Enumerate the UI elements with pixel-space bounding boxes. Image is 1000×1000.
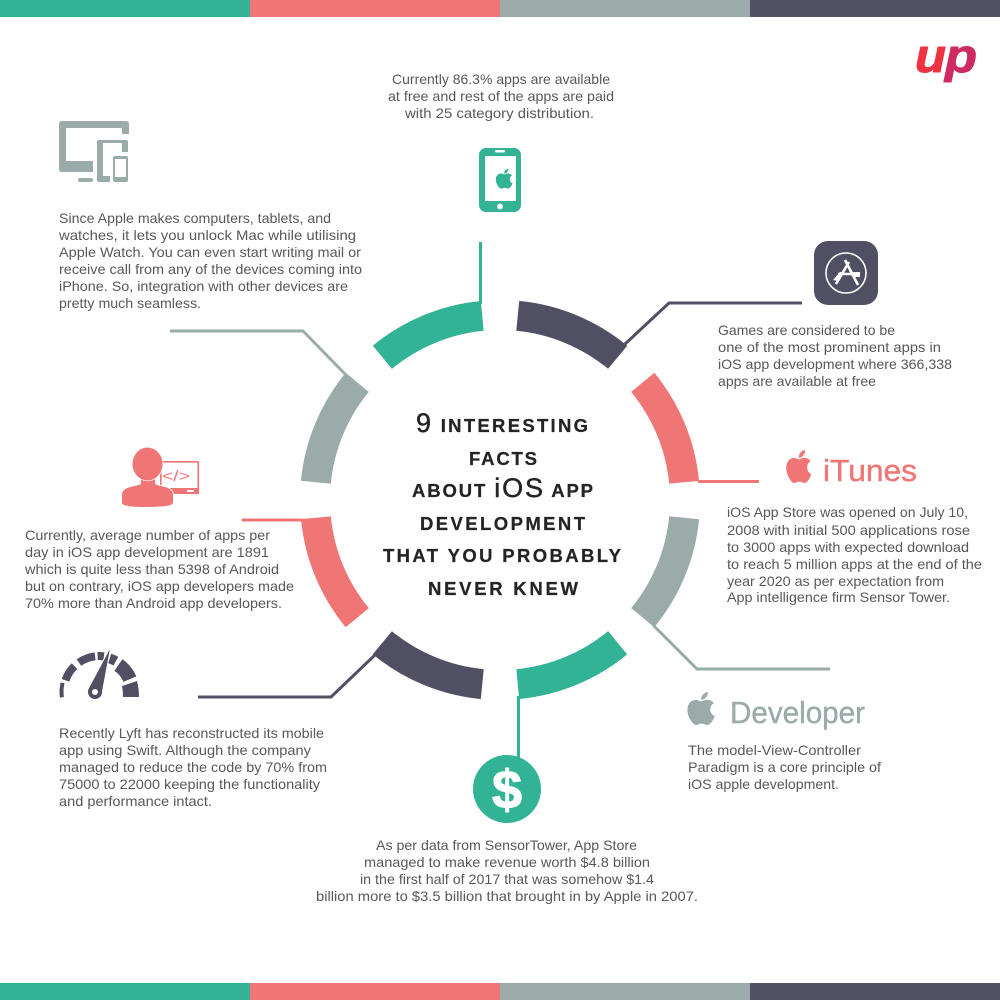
icon: Developer logo: Developer — [730, 695, 865, 730]
text: App Store history: 2008 with initial 500 applications rose — [727, 522, 970, 538]
text: device integration: Since Apple makes computers, tablets, and — [59, 210, 331, 226]
title — [383, 408, 622, 599]
icon: Developer logo — [687, 692, 865, 730]
text: device integration: iPhone. So, integration with other devices are — [59, 278, 348, 294]
connector: red left — [242, 518, 303, 522]
text: revenue: managed to make revenue worth $4.8 billion — [364, 854, 650, 870]
text: games: one of the most prominent apps in — [718, 339, 941, 355]
text: games: Games are considered to be — [718, 322, 895, 338]
text: MVC: Paradigm is a core principle of — [688, 759, 881, 775]
text: device integration: pretty much seamless. — [59, 295, 201, 311]
text: MVC — [688, 742, 881, 792]
text: revenue: in the first half of 2017 that was somehow $1.4 — [360, 871, 654, 887]
connector: dark bottom left — [198, 654, 376, 697]
text: App Store history: iOS App Store was opened on July 10, — [727, 504, 968, 520]
top colour band — [0, 0, 1000, 17]
ring segment: dark bottom left — [373, 631, 484, 699]
title: DEVELOPMENT — [420, 513, 586, 534]
icon: phone — [479, 148, 521, 212]
connector: teal top — [479, 242, 482, 304]
icon: dollar coin — [473, 755, 541, 823]
text: Lyft: and performance intact. — [59, 793, 212, 809]
title: NEVER KNEW — [428, 578, 579, 599]
icon: iTunes logo: iTunes — [823, 453, 917, 488]
panel: device integration fact — [58, 121, 369, 484]
icon: developer with code screen: </> — [162, 468, 190, 485]
text: revenue — [316, 837, 698, 904]
text: App Store history: to 3000 apps with expected download — [727, 539, 969, 555]
text: device integration: receive call from any of the devices coming into — [59, 261, 362, 277]
icon: app store — [814, 241, 878, 305]
connector: grey left — [170, 331, 347, 376]
text: apps per day: Currently, average number of apps per — [25, 527, 270, 543]
text: free apps: with 25 category distribution. — [404, 105, 594, 121]
text: apps per day: which is quite less than 5398 of Android — [24, 561, 279, 577]
text: Lyft: Recently Lyft has reconstructed its mobile — [59, 725, 324, 741]
text: free apps: Currently 86.3% apps are available — [392, 71, 610, 87]
ring segment: red left — [269, 503, 396, 629]
text: free apps — [388, 71, 614, 121]
text: MVC: iOS apple development. — [688, 776, 839, 792]
icon: speedometer — [62, 646, 139, 697]
text: App Store history: App intelligence firm Sensor Tower. — [727, 589, 950, 605]
text: device integration: watches, it lets you unlock Mac while utilising — [58, 227, 356, 243]
text: Lyft: managed to reduce the code by 70% from — [59, 759, 327, 775]
ring segment: teal bottom — [503, 604, 629, 731]
panel: free apps fact — [371, 71, 614, 396]
ring segment: red right — [604, 371, 731, 497]
text: apps per day: 70% more than Android app developers. — [25, 595, 282, 611]
bottom colour band — [0, 983, 1000, 1000]
panel: revenue fact — [316, 604, 698, 904]
text: device integration: Apple Watch. You can even start writing mail or — [59, 244, 361, 260]
text: device integration — [58, 210, 362, 311]
ring segment: teal top — [371, 269, 497, 396]
panel: MVC developer fact — [631, 516, 881, 792]
text: games: apps are available at free — [718, 373, 876, 389]
text: games — [718, 322, 952, 389]
logo: up: u — [915, 29, 946, 82]
text: Lyft — [59, 725, 327, 809]
text: Lyft: app using Swift. Although the company — [59, 742, 311, 758]
text: apps per day — [24, 527, 294, 611]
icon: iTunes logo — [786, 450, 917, 488]
title: FACTS — [469, 448, 537, 469]
text: App Store history: year 2020 as per expectation from — [727, 573, 944, 589]
logo: up: p — [943, 29, 977, 82]
panel: App Store history fact — [604, 371, 982, 605]
icon: desktop tablet and phone — [59, 121, 129, 182]
title: ABOUT iOS APP — [412, 473, 593, 503]
connector: grey right — [653, 625, 830, 669]
panel: Lyft Swift fact — [59, 631, 484, 809]
ring segment: grey right — [631, 516, 699, 627]
panel: apps per day fact — [24, 448, 396, 629]
title: 9 INTERESTING — [416, 408, 588, 438]
title: THAT YOU PROBABLY — [383, 545, 622, 566]
ring segment: dark top right — [516, 301, 627, 369]
connector: dark top right — [624, 303, 802, 345]
text: apps per day: day in iOS app development are 1891 — [25, 544, 269, 560]
text: revenue: billion more to $3.5 billion that brought in by Apple in 2007. — [316, 888, 698, 904]
text: free apps: at free and rest of the apps are paid — [388, 88, 614, 104]
text: games: iOS app development where 366,338 — [718, 356, 952, 372]
text: revenue: As per data from SensorTower, App Store — [376, 837, 637, 853]
connector: teal bottom — [517, 696, 520, 758]
panel: games fact — [516, 241, 952, 389]
connector: red right — [698, 480, 759, 483]
text: apps per day: but on contrary, iOS app developers made — [25, 578, 294, 594]
icon: dollar coin: $ — [492, 760, 522, 820]
text: MVC: The model-View-Controller — [688, 742, 861, 758]
ring segment: grey left — [301, 373, 369, 484]
icon: developer with code screen — [122, 448, 199, 507]
logo: up — [915, 29, 977, 82]
text: App Store history: to reach 5 million apps at the end of the — [727, 556, 982, 572]
text: App Store history — [727, 504, 982, 605]
text: Lyft: 75000 to 22000 keeping the functionality — [59, 776, 320, 792]
